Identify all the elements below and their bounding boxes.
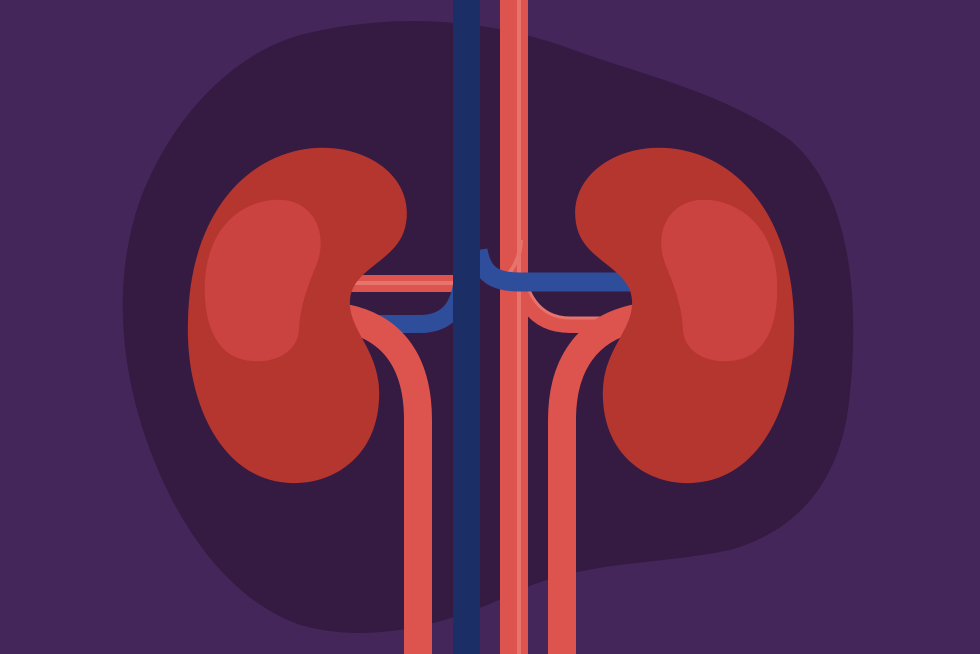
artery (aorta) [495, 0, 528, 654]
ureters [345, 318, 637, 654]
vena cava [453, 0, 480, 654]
right renal artery [514, 250, 615, 325]
right kidney inner lobe [661, 200, 777, 361]
left renal artery [350, 275, 455, 292]
left kidney [188, 148, 407, 483]
right kidney [575, 148, 794, 483]
left kidney inner lobe [205, 200, 321, 361]
left renal vein [370, 285, 462, 324]
background blob [123, 21, 853, 633]
right renal vein [478, 250, 632, 282]
